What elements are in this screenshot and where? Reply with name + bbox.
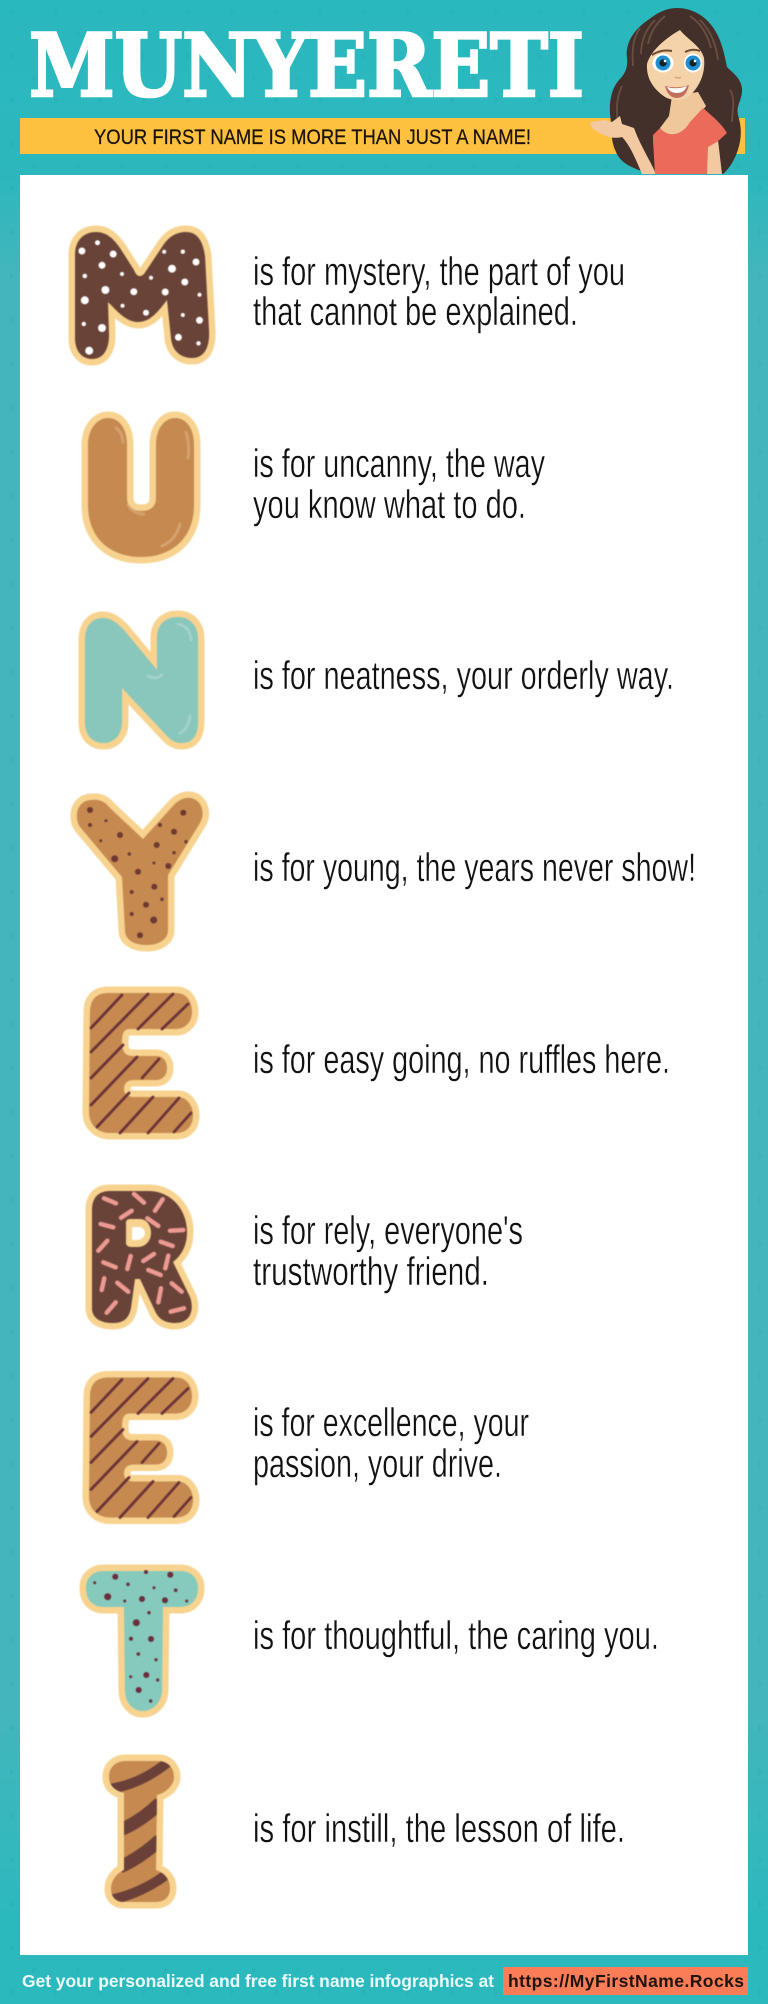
footer call to action: Get your personalized and free first name infographics at: [22, 1971, 494, 1991]
text: M: is for mystery, the part of you: [253, 250, 625, 294]
title: MUNYERETI: [29, 14, 584, 117]
subtitle banner: [20, 118, 745, 154]
second letter E cookie: [89, 1378, 193, 1518]
illustration: smiling woman with long brown hair: [590, 8, 742, 174]
neck and chest: [660, 92, 706, 135]
arm and raised hand: [590, 116, 656, 174]
text: I: is for instill, the lesson of life.: [253, 1807, 625, 1851]
face: [647, 30, 704, 100]
eyes: [652, 50, 702, 72]
letter N cookie: [85, 617, 198, 743]
text: second E: is for excellence, your: [253, 1401, 529, 1445]
text: U: you know what to do.: [253, 483, 526, 527]
letter M cookie: [75, 232, 209, 359]
subtitle banner: YOUR FIRST NAME IS MORE THAN JUST A NAME!: [94, 125, 531, 149]
letter T cookie: [86, 1570, 198, 1711]
letter I cookie: [108, 1761, 174, 1902]
letter rows: [75, 232, 696, 1902]
letter Y cookie: [77, 798, 203, 945]
footer URL badge: [503, 1967, 748, 1995]
letter E cookie: [89, 993, 193, 1133]
smile: [665, 77, 689, 98]
text: R: is for rely, everyone's: [253, 1209, 523, 1253]
letter R cookie: [92, 1191, 192, 1323]
text: M: that cannot be explained.: [253, 290, 578, 334]
text: U: is for uncanny, the way: [253, 442, 545, 486]
coral top: [653, 108, 727, 174]
text: second E: passion, your drive.: [253, 1442, 502, 1486]
footer URL badge: https://MyFirstName.Rocks: [508, 1971, 744, 1991]
letter U cookie: [88, 418, 194, 557]
text: R: trustworthy friend.: [253, 1250, 489, 1294]
